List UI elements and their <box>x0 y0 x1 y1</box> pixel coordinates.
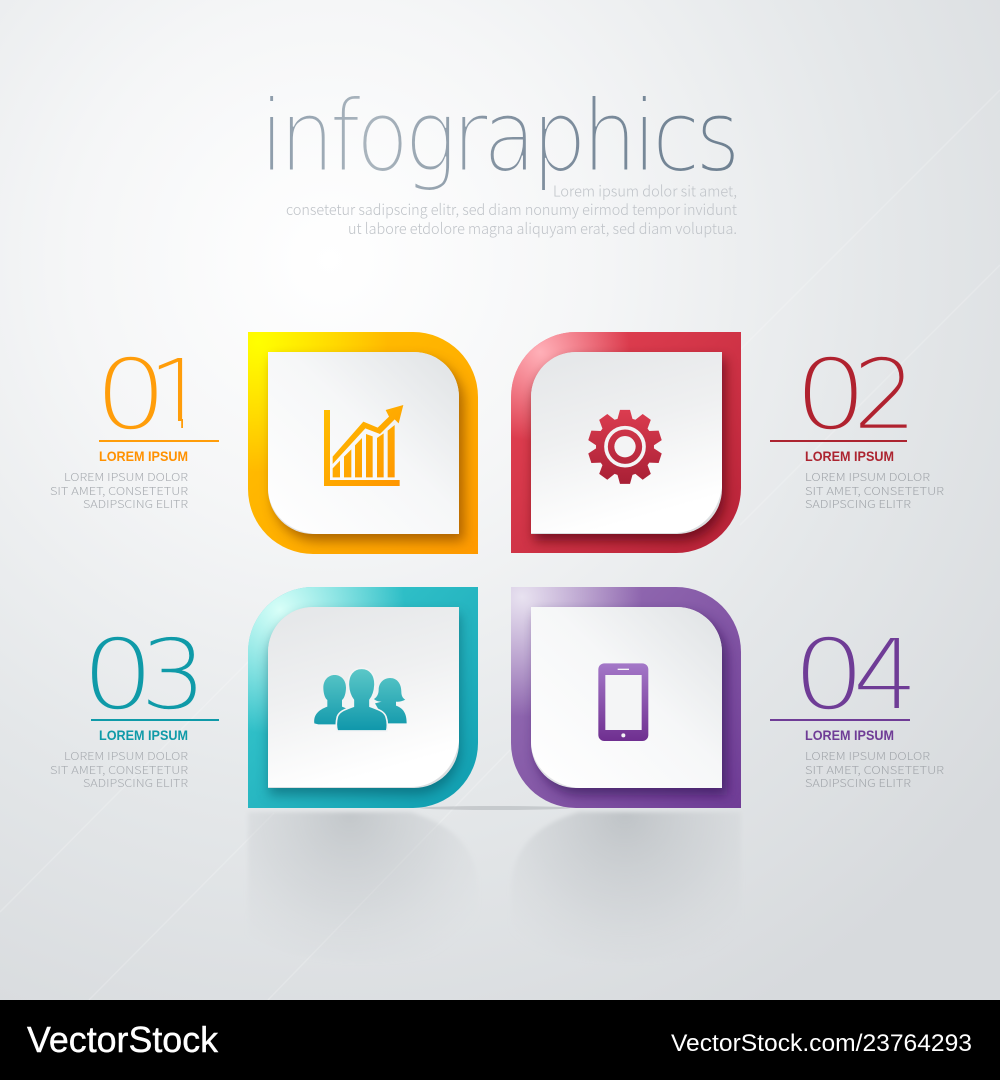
heading: LOREM IPSUM <box>99 448 188 464</box>
label 04 <box>770 619 944 791</box>
frame <box>511 332 741 553</box>
number 04 <box>792 619 918 731</box>
label 02 <box>770 339 944 512</box>
description <box>805 469 944 512</box>
number 03 <box>82 619 207 731</box>
description <box>50 748 188 791</box>
reflection: purple panel <box>511 812 741 962</box>
description: LOREM IPSUM DOLOR <box>805 469 930 485</box>
card shadow <box>269 614 460 795</box>
subtitle text block <box>286 180 738 239</box>
description <box>805 748 944 791</box>
number 02: 0 <box>794 339 867 451</box>
number 04: 0 <box>792 619 866 731</box>
card <box>531 607 722 788</box>
card shadow <box>534 359 725 541</box>
icon: people <box>314 668 407 731</box>
footer logo: VectorStock <box>27 1019 219 1060</box>
panel 3: teal <box>248 587 478 808</box>
heading: LOREM IPSUM <box>99 727 188 743</box>
icon: gear <box>588 410 662 484</box>
footer band <box>0 1000 1000 1080</box>
person left <box>314 675 350 724</box>
card <box>531 352 722 534</box>
frame <box>248 332 478 554</box>
person center <box>336 668 387 731</box>
floor shadow <box>420 806 570 810</box>
description: SIT AMET, CONSETETUR <box>50 762 188 778</box>
rule <box>91 719 219 721</box>
number 04: 4 <box>853 619 918 731</box>
description: SIT AMET, CONSETETUR <box>805 762 944 778</box>
label 01 <box>50 356 219 508</box>
number 02: 2 <box>853 339 917 451</box>
description: SIT AMET, CONSETETUR <box>805 483 944 499</box>
card shadow <box>536 614 727 795</box>
reflection: teal panel <box>248 812 478 962</box>
subtitle text block: Lorem ipsum dolor sit amet, <box>553 180 737 202</box>
icon: smartphone <box>598 663 648 741</box>
rule <box>770 719 910 721</box>
number 01: 1 <box>148 339 209 451</box>
number 02 <box>794 339 917 451</box>
icon: growth chart <box>324 405 403 486</box>
number 03: 0 <box>82 619 154 731</box>
subtitle text block: ut labore etdolore magna aliquyam erat, sed diam voluptua. <box>348 218 737 239</box>
panel 4: purple <box>511 587 741 808</box>
panel 2: red <box>511 332 741 553</box>
subtitle text block: consetetur sadipscing elitr, sed diam nonumy eirmod tempor invidunt <box>286 199 738 220</box>
label 03 <box>50 619 219 791</box>
number 01: 0 <box>94 339 168 451</box>
card shadow <box>273 359 464 541</box>
card <box>268 352 459 534</box>
description: SIT AMET, CONSETETUR <box>50 483 188 499</box>
frame <box>248 587 478 808</box>
rule <box>99 440 219 442</box>
rule <box>770 440 907 442</box>
description: SADIPSCING ELITR <box>805 496 911 512</box>
number 01 <box>104 356 183 430</box>
heading: LOREM IPSUM <box>805 727 894 743</box>
footer url: VectorStock.com/23764293 <box>671 1030 972 1057</box>
frame <box>511 587 741 808</box>
description: LOREM IPSUM DOLOR <box>64 469 188 485</box>
heading: LOREM IPSUM <box>805 448 894 464</box>
description: SADIPSCING ELITR <box>83 496 188 512</box>
description: SADIPSCING ELITR <box>83 775 188 791</box>
number 03: 3 <box>140 619 207 731</box>
panel 1: orange <box>248 332 478 554</box>
description: SADIPSCING ELITR <box>805 775 911 791</box>
description: LOREM IPSUM DOLOR <box>805 748 930 764</box>
person right <box>374 678 407 723</box>
card <box>268 607 459 788</box>
title: infographics <box>260 80 736 194</box>
description <box>50 469 188 512</box>
description: LOREM IPSUM DOLOR <box>64 748 188 764</box>
